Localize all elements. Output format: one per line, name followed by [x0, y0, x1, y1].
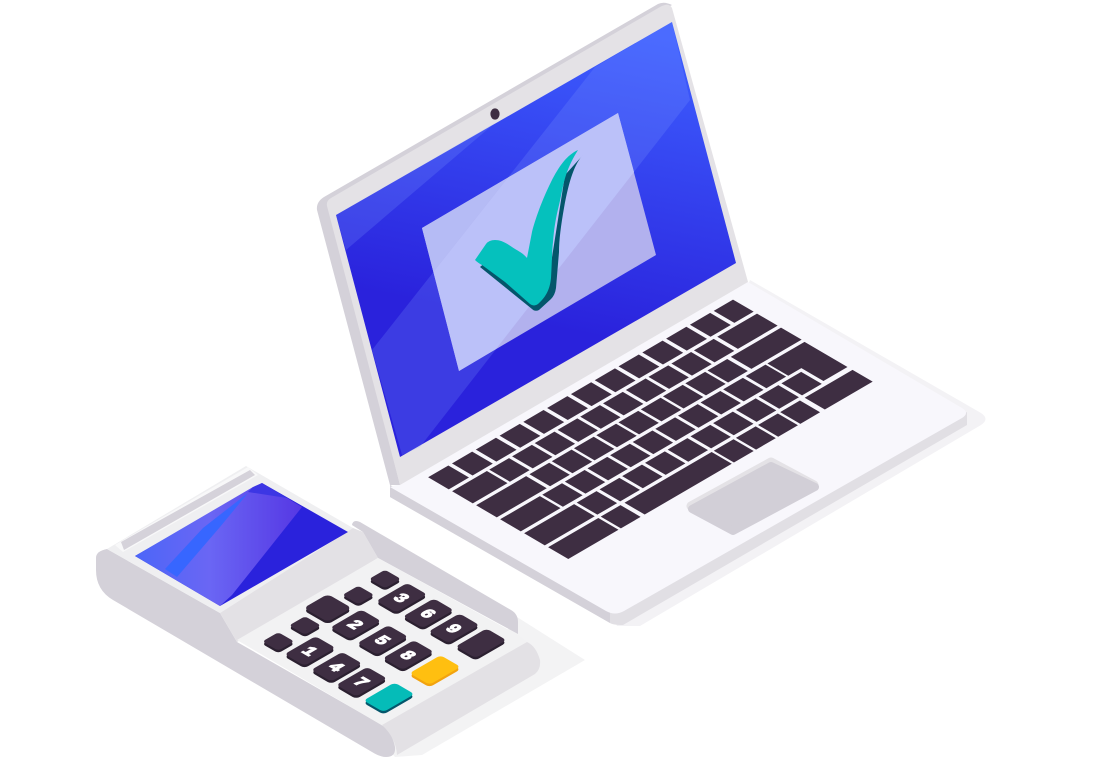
- key: 8: [383, 640, 434, 672]
- key: 5: [357, 625, 408, 657]
- slot frame: [115, 467, 258, 552]
- key: 2: 2: [343, 617, 368, 632]
- row 6 keys with space bar: [550, 371, 871, 558]
- key: 2: [330, 610, 381, 642]
- enter key: [769, 343, 846, 388]
- webcam: [490, 108, 500, 120]
- dialog panel: [422, 113, 656, 371]
- keypad surface: [237, 558, 527, 726]
- key: 4: 4: [324, 660, 349, 674]
- receipt slot: [115, 467, 258, 552]
- key: 6: [403, 599, 454, 631]
- screen band: [165, 493, 248, 577]
- dialog panel light band: [433, 113, 634, 371]
- laptop base top: [390, 282, 966, 614]
- screen corner: [248, 483, 287, 498]
- key: 1: 1: [297, 644, 322, 658]
- check mark face: [475, 150, 578, 306]
- key: 3: 3: [389, 591, 414, 605]
- terminal right wall: [352, 521, 518, 634]
- check mark: [475, 150, 583, 311]
- terminal left side: [96, 549, 395, 757]
- row 4 keys: [502, 366, 784, 530]
- keyboard: [430, 301, 871, 558]
- trackpad: [691, 462, 815, 531]
- key: 1: [284, 636, 336, 668]
- key: small 1: [369, 570, 401, 591]
- row 3 keys: [478, 329, 800, 516]
- trackpad rim: [691, 462, 814, 529]
- screen light band left: [336, 123, 495, 250]
- laptop base front edge: [390, 485, 610, 623]
- check mark shadow: [480, 155, 583, 311]
- key: 7: 7: [349, 675, 374, 689]
- row 2 keys: [454, 315, 776, 502]
- row 1 keys: [430, 301, 752, 488]
- key: 8: 8: [396, 648, 420, 662]
- key: yellow: [410, 655, 460, 687]
- key: small 2: [342, 586, 374, 607]
- key: 9: [428, 614, 480, 646]
- key: 6: 6: [416, 606, 440, 621]
- trackpad surface: [692, 466, 815, 531]
- key: 5: 5: [370, 633, 395, 647]
- terminal front lip: [382, 642, 540, 755]
- laptop lid face: [327, 5, 748, 485]
- laptop screen: [336, 22, 736, 457]
- key: small 3: [289, 616, 321, 637]
- laptop ground shadow: [610, 280, 986, 626]
- laptop: [317, 3, 985, 626]
- key: teal: [364, 683, 414, 715]
- key: 4: [311, 652, 362, 684]
- screen highlight: [135, 487, 302, 606]
- key: small 4: [262, 632, 294, 653]
- row 5 keys: [526, 373, 820, 544]
- laptop base side: [390, 412, 967, 625]
- payment terminal: [96, 466, 585, 757]
- terminal head slope: [220, 528, 378, 642]
- terminal screen: [135, 483, 348, 606]
- terminal ground shadow: [380, 617, 585, 757]
- key: large blank: [304, 594, 352, 624]
- slot strip: [121, 470, 255, 550]
- terminal head top: [107, 466, 353, 613]
- key: 9: 9: [441, 621, 466, 636]
- dialog panel corner: [422, 178, 508, 272]
- key: 7: [336, 667, 387, 699]
- key: 3: [376, 583, 427, 615]
- key: blank right: [456, 629, 506, 661]
- screen light band centre: [372, 22, 690, 455]
- laptop lid back edge: [317, 3, 672, 485]
